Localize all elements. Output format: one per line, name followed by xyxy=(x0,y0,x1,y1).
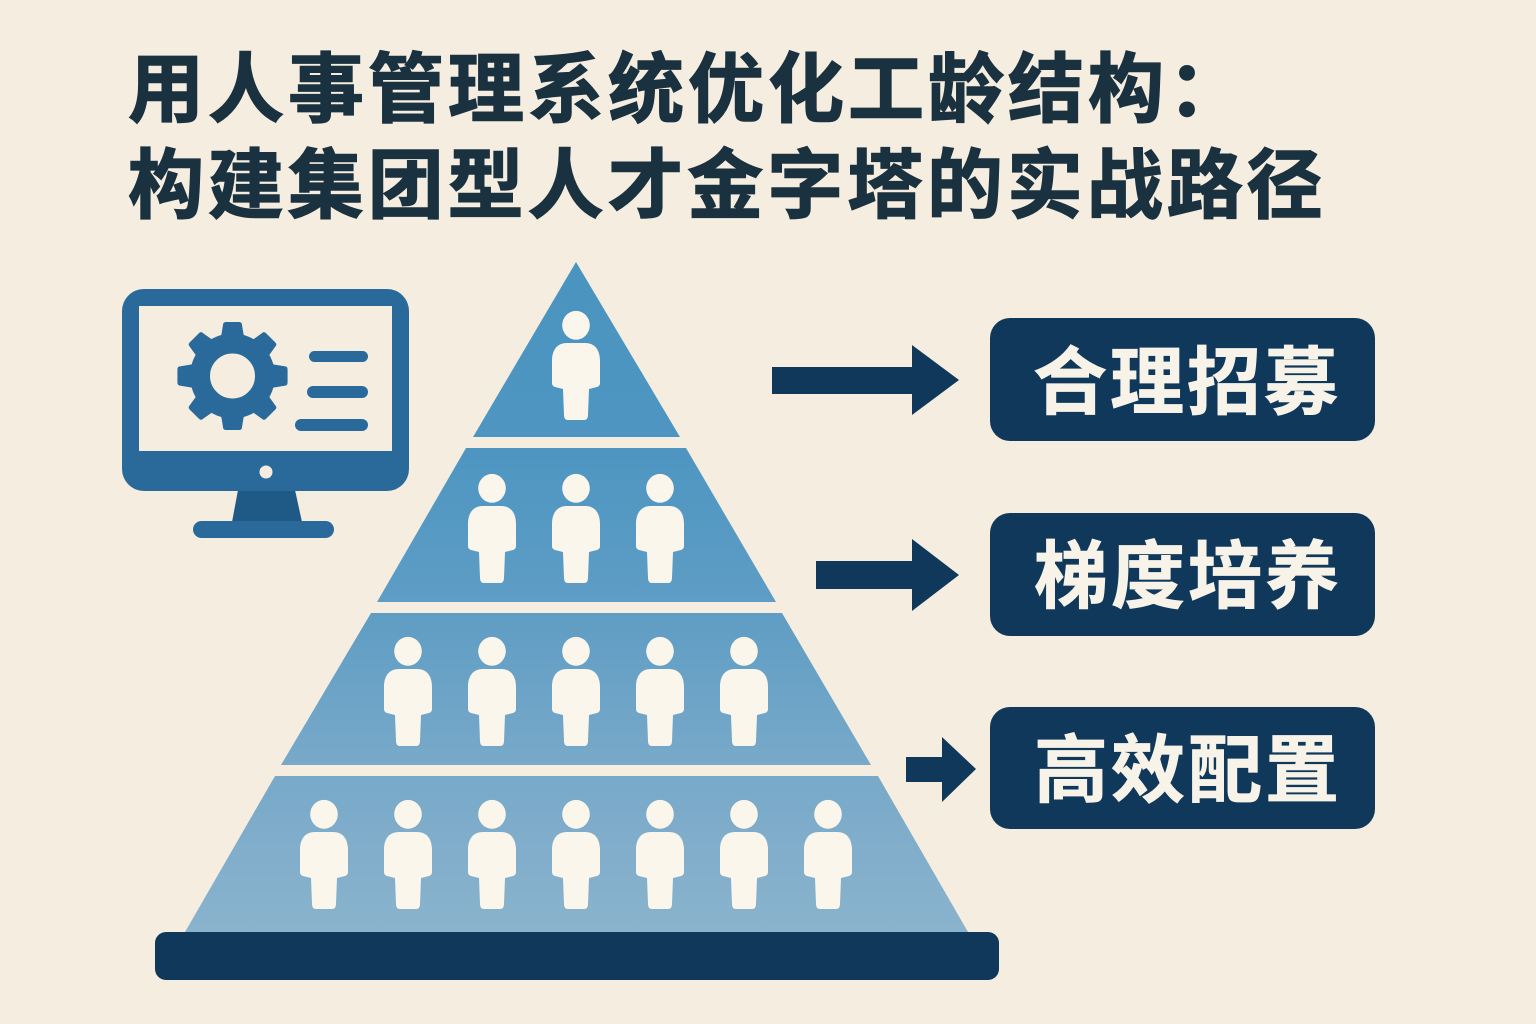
icon: gear xyxy=(177,322,288,430)
person icon xyxy=(552,311,600,420)
monitor power dot xyxy=(260,466,272,478)
monitor screen xyxy=(139,306,392,451)
callout: 高效配置: 高效配置 xyxy=(1034,729,1342,812)
arrow: to 高效配置 xyxy=(906,737,976,802)
monitor stand base xyxy=(193,521,334,538)
tier 2 xyxy=(377,448,776,602)
callout: 高效配置 xyxy=(990,707,1375,829)
callout: 合理招募: 合理招募 xyxy=(1033,341,1341,424)
arrow: to 梯度培养 xyxy=(816,539,959,611)
title: 用人事管理系统优化工龄结构： xyxy=(128,48,1248,133)
title: 构建集团型人才金字塔的实战路径 xyxy=(128,144,1326,229)
monitor stand neck xyxy=(232,490,302,522)
tier 3 xyxy=(281,613,871,765)
tier 1: top xyxy=(473,262,680,437)
tier 4 xyxy=(185,776,968,932)
pyramid xyxy=(155,262,999,980)
people icons row 2 xyxy=(468,474,684,583)
title xyxy=(128,48,1326,229)
arrow: to 合理招募 xyxy=(772,345,959,415)
screen list lines xyxy=(295,351,368,431)
people icons row 3 xyxy=(384,637,768,746)
callout: 合理招募 xyxy=(990,318,1375,441)
people icons row 4 xyxy=(300,800,852,909)
monitor body xyxy=(122,289,409,491)
pyramid base bar xyxy=(155,932,999,980)
icon: computer monitor with gear xyxy=(122,289,409,538)
callout: 梯度培养 xyxy=(990,513,1375,636)
callout: 梯度培养: 梯度培养 xyxy=(1034,535,1342,618)
